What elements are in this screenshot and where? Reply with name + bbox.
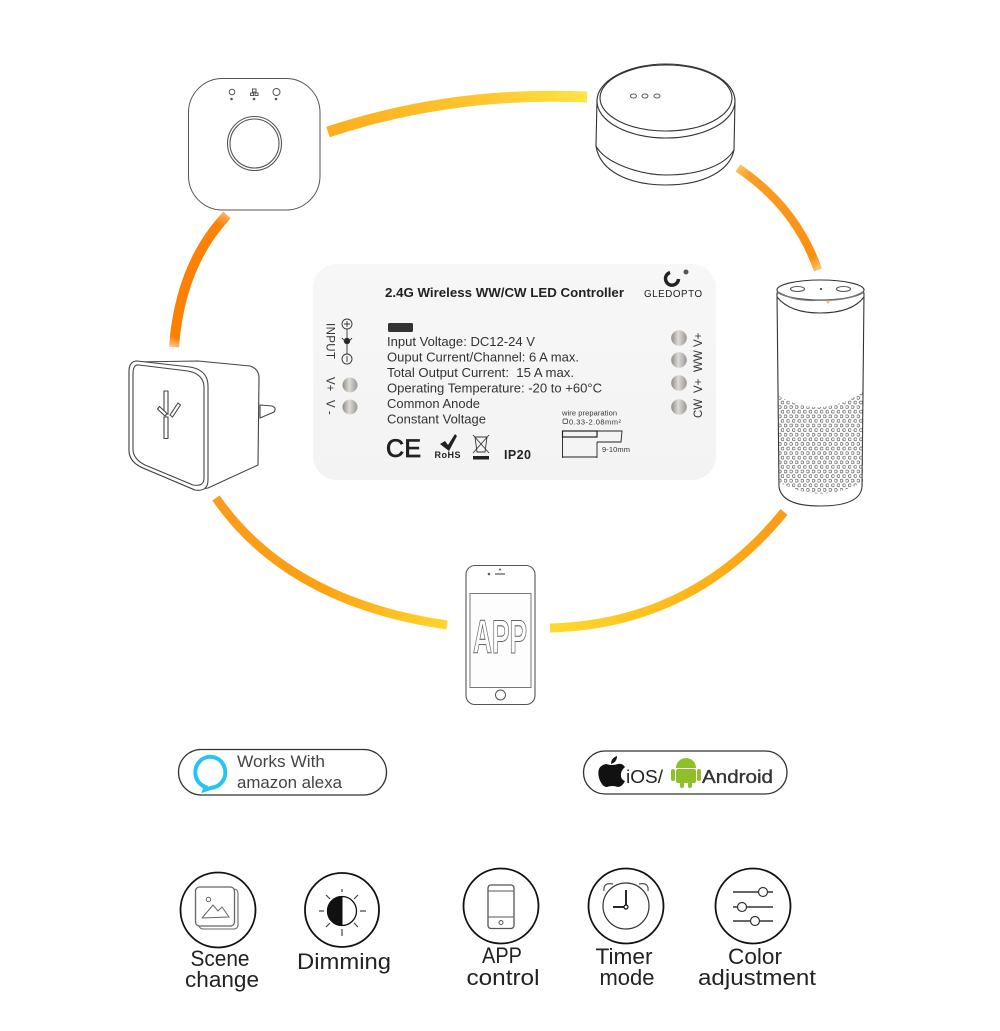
icon: hub bridge — [188, 78, 320, 210]
icon: smartphone with APP: APP — [473, 610, 527, 663]
label — [596, 944, 654, 990]
badge: iOS and Android — [584, 751, 787, 794]
label: output channels: WW — [693, 350, 705, 372]
icon: alexa ring — [195, 757, 225, 790]
wire preparation diagram: 9-10mm — [602, 445, 630, 454]
wire preparation diagram — [561, 408, 630, 458]
icon: phone — [464, 868, 538, 944]
indicator window — [388, 323, 413, 332]
specification text: Common Anode — [387, 396, 480, 411]
certification marks: CE — [386, 435, 421, 463]
label: iOS: iOS/ — [626, 767, 663, 787]
label: INPUT: INPUT — [324, 323, 336, 359]
label: adjustment — [698, 965, 816, 990]
label: output channels: V+ — [693, 332, 705, 347]
label: Color — [728, 944, 782, 969]
icon: plug-in gateway — [129, 361, 275, 490]
specification text: Input Voltage: DC12-24 V — [387, 334, 535, 349]
wire preparation diagram: 0.33-2.08mm² — [569, 418, 622, 426]
label — [698, 944, 816, 990]
label: mode — [600, 965, 654, 990]
specification text — [387, 334, 602, 426]
infographic canvas — [128, 64, 865, 992]
certification marks — [386, 434, 531, 463]
wire preparation diagram: wire preparation — [561, 408, 617, 418]
specification text: Ouput Current/Channel: 6 A max. — [387, 350, 579, 364]
feature: scene change — [180, 872, 259, 992]
specification text: Total Output Current: 15 A max. — [387, 365, 574, 380]
logo: GLEDOPTO — [644, 270, 703, 300]
label: change — [185, 967, 259, 992]
label: Dimming — [297, 949, 391, 974]
label — [185, 946, 259, 992]
specification text: Operating Temperature: -20 to +60°C — [387, 380, 602, 396]
arc: mini controller to speaker — [738, 168, 818, 270]
label: V+ V- input: V+ — [324, 377, 336, 392]
badge: works with amazon alexa — [178, 750, 386, 795]
icon: smartphone with APP — [466, 566, 535, 704]
label: Timer — [596, 944, 652, 969]
icon: alarm clock — [588, 868, 664, 944]
label: Android: Android — [702, 767, 773, 787]
icon: sliders — [716, 868, 790, 944]
arc: bridge to mini controller — [328, 96, 587, 132]
label: APP — [482, 943, 522, 968]
label: Scene — [190, 946, 250, 971]
icon: scene — [180, 872, 256, 948]
icon: round mini controller — [596, 64, 735, 185]
input polarity symbol — [342, 319, 352, 364]
specification text: Constant Voltage — [387, 412, 486, 426]
badge text — [237, 752, 343, 792]
certification marks: IP20 — [504, 448, 531, 462]
feature: APP control — [464, 868, 540, 990]
logo: GLEDOPTO: GLEDOPTO — [644, 289, 703, 300]
feature: dimming — [297, 873, 391, 974]
arc: plug to phone — [216, 498, 447, 625]
arc: phone to speaker — [550, 512, 784, 628]
label: V+ V- input: V - — [324, 400, 336, 415]
badge text: Works With — [237, 752, 325, 771]
feature: timer mode — [588, 868, 664, 990]
label — [466, 943, 540, 990]
icon: cylinder smart speaker — [777, 280, 864, 506]
panel: controller label — [313, 264, 716, 480]
input terminals — [342, 378, 358, 414]
label: V+ V- input — [324, 377, 336, 415]
icon: android robot — [671, 758, 701, 788]
heading: controller name: 2.4G Wireless WW/CW LED Controller — [385, 285, 624, 300]
certification marks: RoHS — [434, 450, 460, 460]
output terminals — [671, 330, 687, 415]
feature: color adjustment — [698, 868, 816, 990]
icon: apple — [598, 756, 625, 787]
label: output channels: CW — [693, 399, 705, 418]
label: control — [466, 965, 540, 990]
icon: half sun — [305, 873, 379, 947]
badge text: amazon alexa — [237, 773, 343, 792]
label: output channels — [693, 332, 705, 418]
label: output channels: V+ — [693, 378, 705, 393]
arc: plug to bridge — [174, 215, 227, 347]
